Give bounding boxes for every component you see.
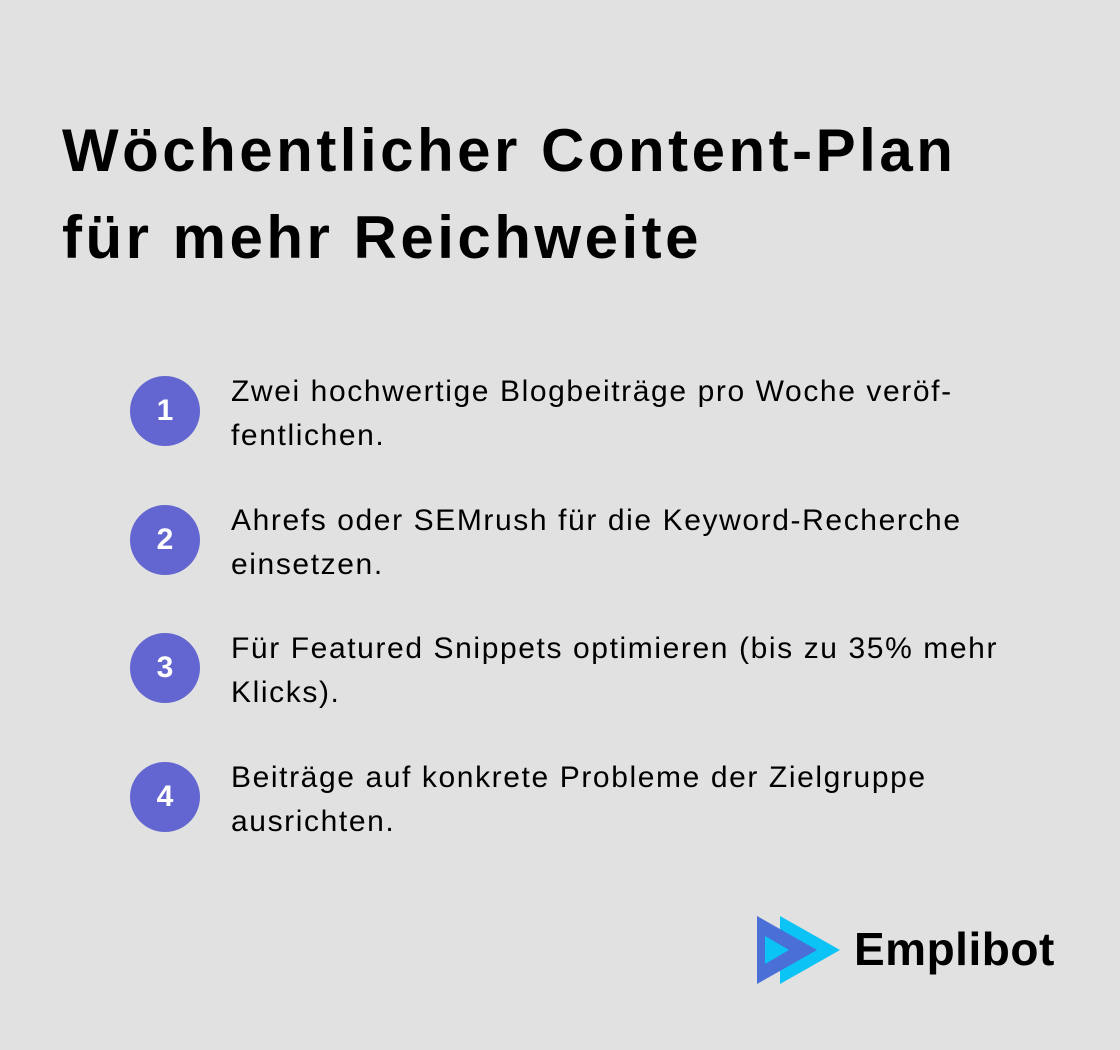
circle 3: 3 [157, 651, 173, 684]
title: für mehr Reichweite [62, 204, 702, 271]
text 3: Für Featured Snippets optimieren (bis zu 35% mehr [231, 632, 998, 665]
circle 3 [130, 633, 200, 703]
text 2: Ahrefs oder SEMrush für die Keyword-Recherche [231, 504, 962, 537]
circle 1: 1 [157, 394, 173, 427]
title: Wöchentlicher Content-Plan [62, 117, 956, 184]
item 4 [130, 761, 927, 838]
text 1: fentlichen. [231, 419, 385, 452]
text 3 [231, 632, 998, 709]
logo text: Emplibot [854, 923, 1055, 975]
circle 1 [130, 376, 200, 446]
circle 2 [130, 505, 200, 575]
text 2: einsetzen. [231, 548, 384, 581]
text 4: Beiträge auf konkrete Probleme der Zielgruppe [231, 761, 927, 794]
text 4: ausrichten. [231, 805, 395, 838]
item 1 [130, 375, 953, 452]
text 1 [231, 375, 953, 452]
circle 4 [130, 762, 200, 832]
icon: play triangles [757, 916, 840, 984]
logo: Emplibot [757, 916, 1055, 984]
item 3 [130, 632, 998, 709]
text 1: Zwei hochwertige Blogbeiträge pro Woche veröf- [231, 375, 953, 408]
circle 4: 4 [157, 780, 173, 813]
title [62, 117, 956, 271]
circle 2: 2 [157, 523, 173, 556]
text 2 [231, 504, 962, 581]
item 2 [130, 504, 962, 581]
text 3: Klicks). [231, 676, 340, 709]
text 4 [231, 761, 927, 838]
